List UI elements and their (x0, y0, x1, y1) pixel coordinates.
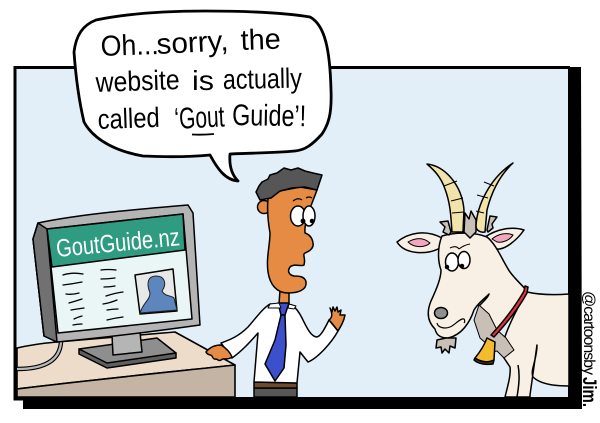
speech text: called (97, 102, 160, 135)
credit (578, 291, 599, 407)
goat horns (427, 163, 513, 232)
speech text: Guide’! (232, 99, 306, 133)
head (256, 168, 322, 293)
speech text: actually (223, 63, 302, 95)
monitor (33, 205, 200, 368)
trousers and belt (254, 382, 297, 397)
goat collar (491, 286, 528, 337)
hair (256, 168, 322, 200)
collar (268, 303, 296, 309)
goat ears (397, 228, 524, 253)
hand on desk (206, 345, 232, 361)
monitor screen (47, 214, 192, 333)
goat face (434, 244, 470, 328)
goat chin tuft (436, 338, 456, 353)
goat head (428, 233, 527, 338)
goat tuft (440, 211, 497, 238)
tie (265, 303, 289, 381)
panel: background and frame (15, 66, 582, 409)
credit: Jim. (578, 377, 599, 407)
speech text: ‘Gout (174, 100, 226, 136)
monitor bezel (33, 205, 200, 342)
web page text lines (63, 270, 123, 325)
monitor cable (17, 342, 61, 369)
goat beard (474, 305, 514, 358)
shirt (221, 304, 338, 383)
goat (397, 163, 569, 397)
monitor stand (79, 332, 176, 368)
speech text: is (192, 65, 214, 96)
speech text: sorry, (156, 25, 229, 61)
speech text (94, 24, 306, 136)
speech text: Oh... (100, 29, 159, 63)
monitor site title: GoutGuide.nz (55, 223, 181, 263)
credit: @cartoonsby (580, 291, 597, 375)
neck (279, 290, 289, 307)
web page photo (135, 269, 177, 314)
speech bubble (74, 11, 331, 181)
speech text: the (240, 24, 281, 57)
man (206, 168, 345, 397)
desk (17, 332, 235, 397)
eyes (290, 206, 315, 226)
goat bell (474, 338, 495, 364)
waving hand (329, 307, 345, 331)
goat body (502, 292, 569, 397)
speech text: website (94, 64, 180, 98)
